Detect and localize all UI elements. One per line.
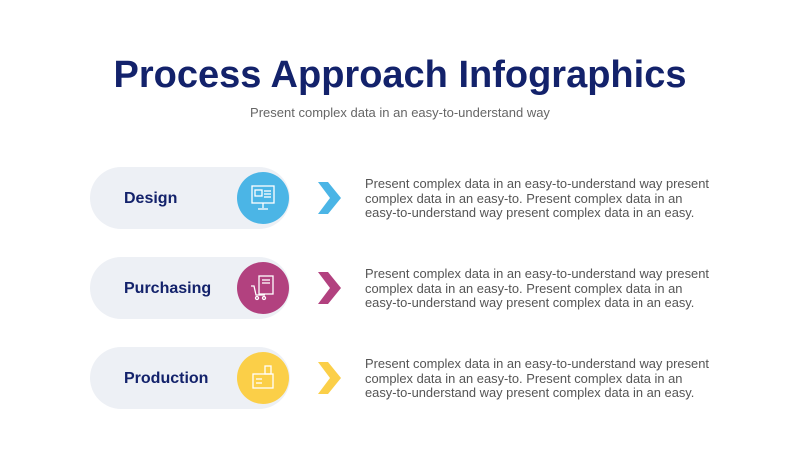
- text: easy-to-understand way present complex data in an easy.: [365, 385, 694, 400]
- text: easy-to-understand way present complex data in an easy.: [365, 205, 694, 220]
- icon: factory: [237, 352, 289, 404]
- text: Present complex data in an easy-to-understand way present: [365, 176, 709, 191]
- text: [365, 356, 709, 400]
- pill: purchasing: [90, 257, 290, 319]
- text: complex data in an easy-to. Present complex data in an: [365, 190, 682, 206]
- pill: production: [90, 347, 290, 409]
- row: purchasing: [90, 257, 709, 319]
- text: [365, 266, 709, 310]
- icon: cart: [237, 262, 289, 314]
- pill: design: [90, 167, 290, 229]
- arrow: [318, 272, 341, 304]
- row: design: [90, 167, 709, 229]
- title: Process Approach Infographics: [114, 54, 686, 96]
- text: complex data in an easy-to. Present complex data in an: [365, 280, 682, 296]
- icon: monitor: [237, 172, 289, 224]
- arrow: [318, 362, 341, 394]
- pill: production: Production: [124, 370, 208, 387]
- text: Present complex data in an easy-to-understand way present: [365, 266, 709, 281]
- arrow: [318, 182, 341, 214]
- text: easy-to-understand way present complex data in an easy.: [365, 295, 694, 310]
- text: complex data in an easy-to. Present complex data in an: [365, 370, 682, 386]
- text: Present complex data in an easy-to-understand way present: [365, 356, 709, 371]
- subtitle: Present complex data in an easy-to-understand way: [250, 105, 550, 120]
- text: [365, 176, 709, 220]
- pill: design: Design: [124, 190, 177, 207]
- row: production: [90, 347, 709, 409]
- pill: purchasing: Purchasing: [124, 280, 211, 297]
